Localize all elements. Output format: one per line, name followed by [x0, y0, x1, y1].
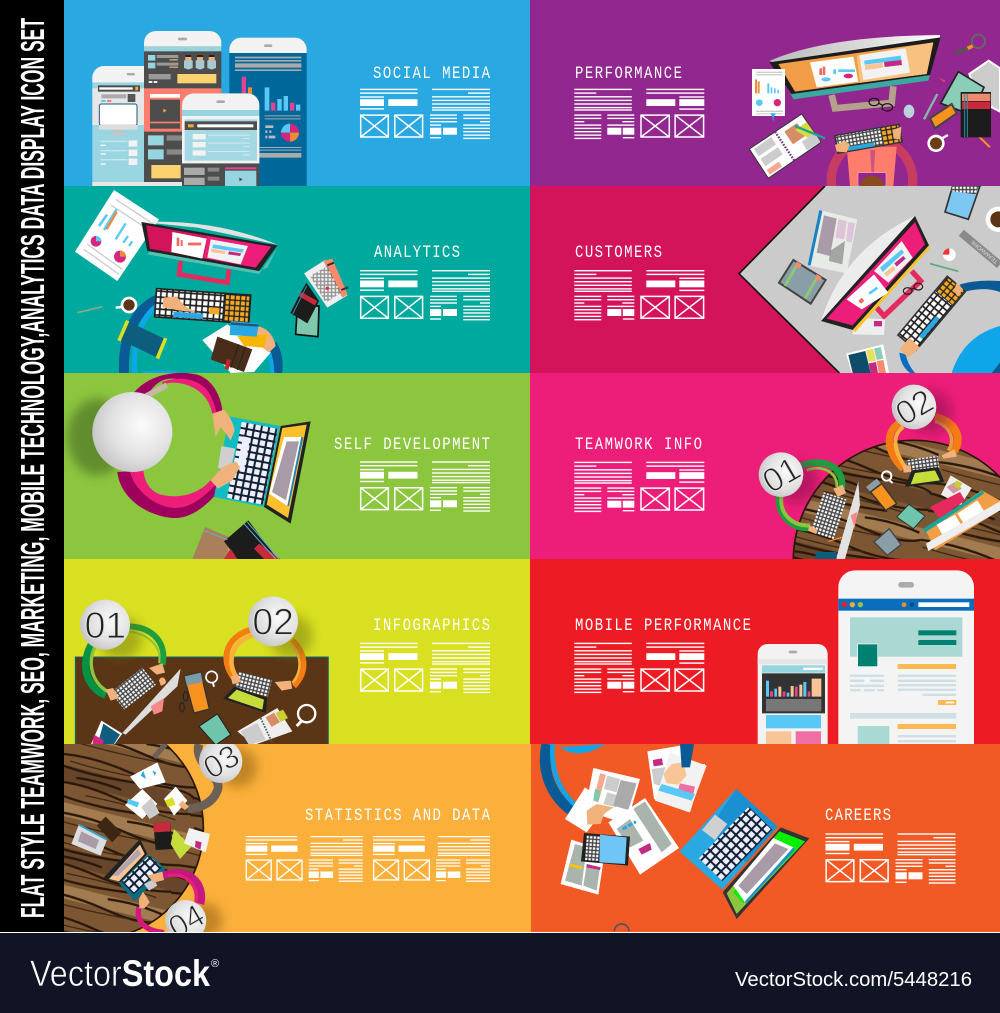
sphere shadows — [776, 390, 952, 503]
laptop — [103, 839, 166, 901]
icon: coffee cup — [986, 207, 1000, 232]
book — [199, 714, 231, 745]
panel: self development — [64, 373, 530, 559]
grey desk — [739, 186, 1000, 373]
icon: coffee cup — [927, 135, 948, 152]
wireframe text block — [360, 461, 490, 512]
heading: CAREERS — [825, 806, 891, 826]
heading: ANALYTICS — [374, 243, 460, 263]
sphere 01: 01 — [756, 450, 807, 501]
illustration: chair and person — [831, 139, 913, 221]
round wooden table — [793, 440, 1000, 680]
monitor — [836, 481, 860, 559]
keyboard 01 — [811, 492, 846, 539]
person chair — [899, 281, 1000, 373]
heading: STATISTICS AND DATA — [305, 806, 490, 826]
laptop — [905, 467, 944, 487]
sphere shadows — [99, 615, 312, 660]
hands — [211, 410, 240, 489]
person arm — [545, 744, 605, 818]
phone — [581, 833, 630, 866]
small keyboard — [906, 456, 939, 473]
illustration: monitor — [821, 216, 930, 335]
panel: teamwork info — [530, 373, 1000, 559]
ruler with label: TEAMWORK — [970, 238, 1000, 264]
head sphere — [92, 392, 172, 472]
wireframe text block — [574, 270, 704, 320]
sphere 01: 01 — [85, 604, 126, 646]
stock id: VectorStock.com/5448216 — [735, 969, 972, 991]
illustration: person arm ring — [124, 298, 278, 373]
pie — [943, 248, 956, 261]
person 01 arms — [778, 463, 842, 529]
illustration: phone with team — [142, 31, 221, 187]
round wooden table — [0, 716, 203, 940]
logo: VectorStock — [30, 953, 210, 994]
wireframe block right — [373, 836, 490, 882]
big coffee cup — [297, 705, 315, 726]
illustration: monitor — [769, 35, 941, 108]
sphere 02: 02 — [252, 601, 294, 643]
person 02 arms — [889, 417, 958, 469]
illustration: phone with monitor — [92, 66, 182, 187]
registered mark: ® — [211, 958, 219, 970]
small devices — [71, 817, 210, 859]
desk — [75, 657, 328, 747]
person 03 arm — [154, 744, 218, 809]
report page — [75, 190, 159, 281]
hands — [835, 127, 901, 152]
panel: mobile performance — [530, 559, 1000, 744]
heading: SELF DEVELOPMENT — [334, 435, 490, 455]
hand — [587, 804, 613, 825]
panel: analytics — [64, 186, 530, 373]
hands 02 — [231, 674, 292, 691]
phone — [184, 672, 209, 713]
icon: notebook — [749, 114, 825, 178]
sphere 02 — [248, 596, 298, 646]
sphere 04: 04 — [162, 897, 210, 945]
icon: keyboard — [154, 288, 252, 324]
color sheet — [846, 344, 889, 373]
icon: tablet — [117, 320, 167, 359]
panel: infographics — [64, 559, 530, 744]
small phone — [758, 644, 828, 746]
books stack — [930, 61, 1000, 137]
head shadow — [67, 399, 127, 475]
icon: magnifier — [956, 35, 985, 53]
wireframe text block — [826, 833, 956, 884]
hands — [139, 872, 164, 908]
panel: social media — [64, 0, 530, 186]
tablet — [779, 260, 826, 304]
panel: customers — [530, 186, 1000, 373]
monitor 01 — [122, 669, 181, 735]
magnifier cup — [882, 471, 893, 483]
laptop — [214, 416, 311, 524]
icon: glasses — [903, 283, 923, 294]
wireframe text block — [360, 270, 490, 320]
books — [192, 520, 281, 559]
cup — [206, 671, 217, 687]
side banner — [0, 0, 64, 932]
footer bar — [0, 932, 1000, 1013]
illustration: front phone — [182, 93, 259, 187]
pencils — [924, 77, 990, 147]
big phone — [838, 570, 974, 746]
partial ring — [614, 924, 629, 931]
sphere 02: 02 — [889, 383, 940, 433]
heading: PERFORMANCE — [575, 64, 682, 84]
sphere shadows — [186, 747, 257, 939]
laptop 02 — [223, 686, 267, 713]
pencil — [930, 264, 958, 271]
arm ring — [117, 373, 222, 518]
icon: glasses — [869, 98, 893, 111]
keyboard 01 — [111, 668, 156, 709]
notebook — [237, 708, 292, 745]
books — [290, 283, 319, 337]
sphere 01 — [80, 600, 130, 650]
illustration: monitor — [141, 222, 277, 283]
person 04 arm — [138, 873, 201, 933]
heading: SOCIAL MEDIA — [373, 64, 490, 84]
hands — [899, 283, 963, 358]
wireframe text block — [574, 462, 704, 512]
report page — [752, 69, 785, 122]
icon: keyboard — [897, 275, 967, 351]
sphere 03: 03 — [197, 737, 245, 786]
arms person 02 — [226, 630, 304, 686]
panel: performance — [530, 0, 1000, 186]
heading: TEAMWORK INFO — [575, 435, 702, 455]
icon: keyboard — [834, 124, 903, 154]
pencil — [77, 307, 102, 313]
icon: calendar — [304, 259, 348, 308]
keyboard 02 — [234, 671, 272, 697]
ruler with label — [959, 230, 1000, 268]
heading: INFOGRAPHICS — [373, 616, 490, 636]
hands 01 — [106, 663, 166, 701]
laptop — [679, 789, 809, 919]
icon: tablet top — [945, 186, 980, 219]
wallet and papers — [202, 321, 276, 373]
glasses — [180, 692, 188, 712]
icon: mouse — [904, 105, 914, 118]
panel: careers — [531, 744, 1000, 932]
hands — [808, 449, 957, 534]
layout sheet — [808, 210, 857, 273]
wireframe text block — [360, 89, 490, 139]
wireframe text block — [360, 643, 490, 693]
arms person 01 — [86, 626, 163, 695]
papers — [125, 762, 189, 819]
icon: coffee cup — [116, 297, 137, 313]
wireframe text block — [574, 89, 704, 139]
hand — [163, 296, 197, 312]
panel: statistics and data — [64, 737, 531, 945]
sheets — [91, 721, 122, 745]
illustration: phone with charts — [229, 38, 307, 187]
papers and monitor right — [923, 475, 1000, 551]
wireframe block left — [246, 836, 363, 882]
books — [815, 479, 925, 559]
sheets — [561, 744, 707, 895]
heading: MOBILE PERFORMANCE — [575, 616, 751, 636]
wireframe text block — [574, 643, 704, 693]
heading: CUSTOMERS — [575, 243, 662, 263]
